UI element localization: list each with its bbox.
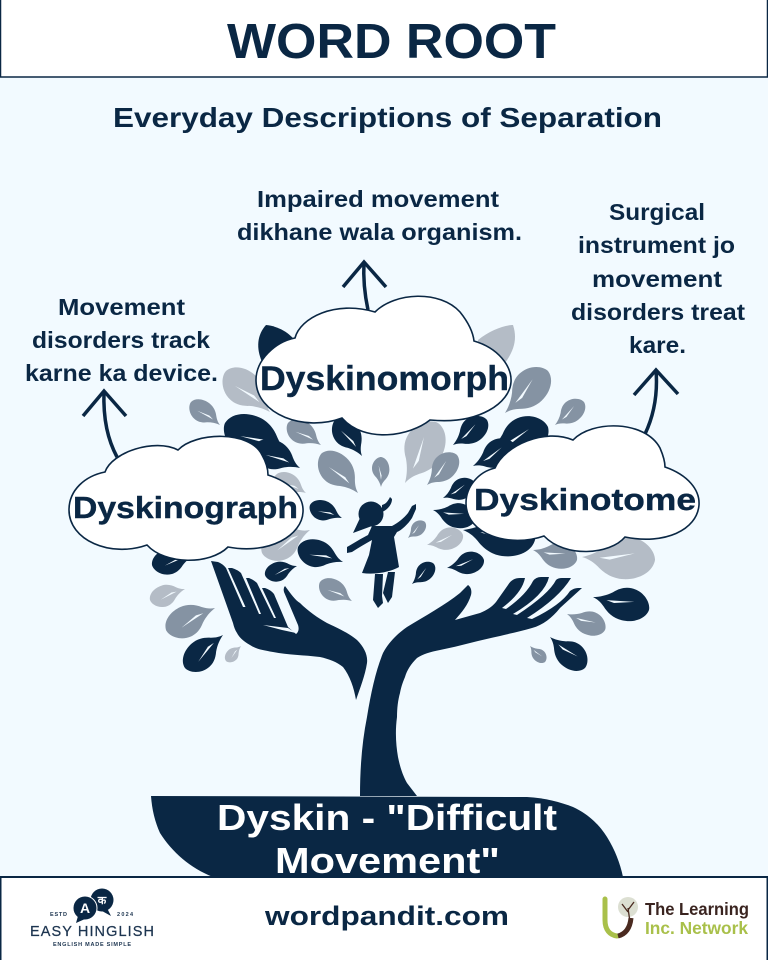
palm crease <box>263 625 296 633</box>
cloud: Dyskinotome <box>466 426 699 552</box>
subtitle: Everyday Descriptions of Separation <box>113 102 662 133</box>
text: Dyskinomorph meaning <box>237 186 522 245</box>
cloud: Dyskinograph: Dyskinograph <box>73 490 298 525</box>
header banner <box>0 0 768 77</box>
logo: Easy Hinglish: A <box>80 900 90 916</box>
tree trunk with right hand branch <box>360 577 582 796</box>
arrow: right <box>634 370 678 434</box>
logo: The Learning Inc. Network: The Learning <box>645 899 749 919</box>
text: Dyskinotome meaning: disorders treat <box>571 299 745 325</box>
logo: Easy Hinglish: ENGLISH MADE SIMPLE <box>53 942 131 948</box>
website: wordpandit.com <box>264 901 509 931</box>
footer bar <box>0 877 768 960</box>
arrow: top <box>343 262 386 310</box>
root label <box>217 797 557 881</box>
cloud: Dyskinomorph: Dyskinomorph <box>260 360 509 398</box>
text: Dyskinotome meaning <box>571 199 745 358</box>
arrow: left <box>83 391 126 457</box>
soil mound <box>151 796 623 877</box>
falling leaves <box>147 325 656 679</box>
root label: Dyskin - "Difficult <box>217 797 557 838</box>
text: Dyskinotome meaning: Surgical <box>609 199 705 225</box>
text: Dyskinomorph meaning: dikhane wala organism. <box>237 219 522 245</box>
child silhouette <box>347 497 416 608</box>
text: Dyskinomorph meaning: Impaired movement <box>257 186 499 212</box>
logo: The Learning Inc. Network: Inc. Network <box>645 918 748 938</box>
text: Dyskinograph meaning <box>25 294 218 386</box>
cloud: Dyskinograph <box>69 436 303 560</box>
text: Dyskinograph meaning: karne ka device. <box>25 360 218 386</box>
left hand branch <box>211 561 367 700</box>
text: Dyskinotome meaning: kare. <box>629 332 686 358</box>
logo: The Learning Inc. Network <box>605 897 749 938</box>
logo: Easy Hinglish: ESTD <box>50 912 67 918</box>
title: WORD ROOT <box>227 15 556 69</box>
cloud: Dyskinomorph <box>256 296 511 435</box>
logo: Easy Hinglish <box>30 888 154 948</box>
root label: Movement" <box>275 840 500 881</box>
text: Dyskinotome meaning: movement <box>592 266 722 292</box>
logo: Easy Hinglish: क <box>97 895 107 907</box>
logo: Easy Hinglish: EASY HINGLISH <box>30 924 154 940</box>
logo: Easy Hinglish: 2024 <box>117 912 134 918</box>
text: Dyskinograph meaning: disorders track <box>32 327 210 353</box>
text: Dyskinotome meaning: instrument jo <box>578 232 735 258</box>
text: Dyskinograph meaning: Movement <box>58 294 185 320</box>
cloud: Dyskinotome: Dyskinotome <box>474 482 696 517</box>
